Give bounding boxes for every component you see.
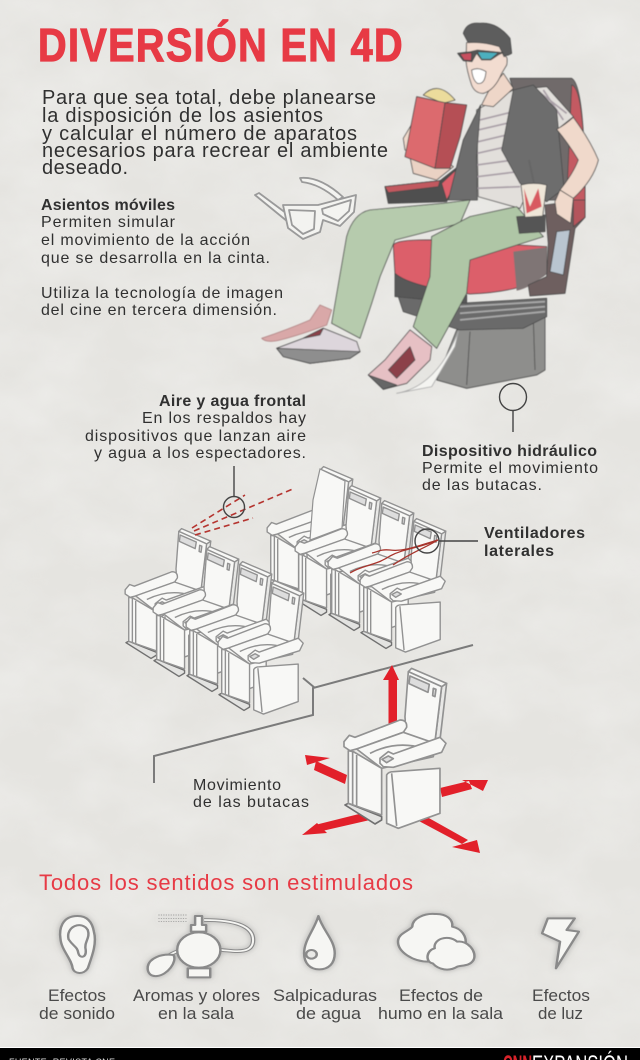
- text: aire y agua frontal: dispositivos que lanzan aire: [85, 428, 306, 445]
- seat base: [395, 273, 547, 388]
- right armrest: [528, 200, 585, 296]
- intro text: [42, 87, 388, 179]
- cup holder and cup: [517, 160, 547, 233]
- air and water dashed jets: [192, 488, 295, 535]
- icon: water drop: [304, 916, 335, 969]
- caption: agua: [273, 986, 377, 1023]
- text: asientos móviles: Asientos móviles: [41, 197, 175, 214]
- striped shirt: [477, 87, 573, 208]
- icon: ear: [60, 916, 95, 973]
- text: tecnología 3D: del cine en tercera dimensión.: [41, 302, 277, 319]
- right leg: [413, 207, 543, 348]
- red cushion: [393, 240, 547, 294]
- footer bar: [0, 1047, 640, 1060]
- caption: luz: [532, 986, 590, 1023]
- vest: [448, 85, 564, 202]
- caption: aromas: [133, 986, 260, 1023]
- marker: air and water: [224, 466, 244, 518]
- illustration: man in 4D seat: [262, 23, 598, 393]
- left shoe: [277, 328, 360, 363]
- left leg: [332, 200, 470, 338]
- intro text: deseado.: [42, 157, 128, 179]
- caption: aromas: Aromas y olores: [133, 986, 260, 1005]
- caption: agua: de agua: [296, 1004, 362, 1023]
- caption: sonido: de sonido: [39, 1004, 115, 1023]
- text: ventiladores laterales: laterales: [484, 543, 554, 560]
- heading: senses: Todos los sentidos son estimulados: [39, 870, 413, 895]
- text: aire y agua frontal: [85, 393, 306, 462]
- text: asientos móviles: que se desarrolla en la cinta.: [41, 250, 270, 267]
- text: movimiento de las butacas: Movimiento: [193, 777, 281, 794]
- arrow: front left: [302, 812, 370, 835]
- blank backrest on first seat: [310, 469, 345, 540]
- text: dispositivo hidráulico: [422, 443, 598, 494]
- caption: humo: humo en la sala: [378, 1004, 504, 1023]
- caption: humo: [378, 986, 504, 1023]
- red movement arrows: [302, 665, 488, 853]
- popcorn box and hand: [403, 89, 467, 168]
- text: aire y agua frontal: En los respaldos hay: [142, 410, 306, 427]
- back row of seats: [267, 467, 446, 652]
- text: aire y agua frontal: Aire y agua frontal: [159, 393, 306, 410]
- icon: 3D glasses: [255, 178, 356, 239]
- motion streak behind left shoe: [262, 305, 332, 341]
- arrow: back right: [440, 780, 488, 797]
- caption: sonido: [39, 986, 115, 1023]
- caption: humo: Efectos de: [399, 986, 483, 1005]
- caption: sonido: Efectos: [48, 986, 106, 1005]
- text: asientos móviles: [41, 197, 270, 267]
- intro text: necesarios para recrear el ambiente: [42, 140, 388, 162]
- arrow: back left: [305, 755, 347, 784]
- single moving seat: [344, 668, 447, 828]
- floor outline: [154, 645, 473, 783]
- intro text: la disposición de los asientos: [42, 105, 323, 127]
- icon: smoke clouds: [398, 914, 474, 970]
- text: asientos móviles: el movimiento de la acción: [41, 232, 250, 249]
- text: ventiladores laterales: Ventiladores: [484, 525, 585, 542]
- icon: perfume bottle: [148, 915, 253, 977]
- text: ventiladores laterales: [484, 525, 585, 560]
- caption: luz: Efectos: [532, 986, 590, 1005]
- text: movimiento de las butacas: de las butacas: [193, 794, 309, 811]
- callout: dispositivo hidráulico marker: [500, 384, 526, 432]
- text: dispositivo hidráulico: de las butacas.: [422, 477, 542, 494]
- title: DIVERSIÓN EN 4D: [38, 19, 403, 72]
- text: dispositivo hidráulico: Dispositivo hidráulico: [422, 443, 597, 460]
- right shoe: [368, 330, 458, 393]
- marker: side fans: [415, 529, 478, 553]
- arrow: front right: [417, 817, 480, 853]
- text: tecnología 3D: [41, 285, 283, 319]
- intro text: Para que sea total, debe planearse: [42, 87, 376, 109]
- text: tecnología 3D: Utiliza la tecnología de imagen: [41, 285, 283, 302]
- arrow: up: [383, 665, 399, 747]
- text: movimiento de las butacas: [193, 777, 309, 811]
- text: dispositivo hidráulico: Permite el movimiento: [422, 460, 598, 477]
- intro text: y calcular el número de aparatos: [42, 123, 357, 145]
- icon row: [60, 914, 579, 977]
- front row of seats: [125, 529, 304, 714]
- left armrest: [385, 160, 467, 203]
- icon: lightning: [542, 918, 579, 968]
- caption: luz: de luz: [538, 1004, 583, 1023]
- icon captions: [39, 986, 590, 1023]
- arm and hand: [555, 117, 598, 223]
- forearm: [410, 157, 453, 180]
- head: [458, 23, 513, 107]
- text: aire y agua frontal: y agua a los espectadores.: [94, 445, 306, 462]
- caption: aromas: en la sala: [158, 1004, 235, 1023]
- caption: agua: Salpicaduras: [273, 986, 377, 1005]
- seat back: [510, 78, 585, 200]
- text: asientos móviles: Permiten simular: [41, 214, 176, 231]
- side fan wavy streams: [350, 540, 438, 573]
